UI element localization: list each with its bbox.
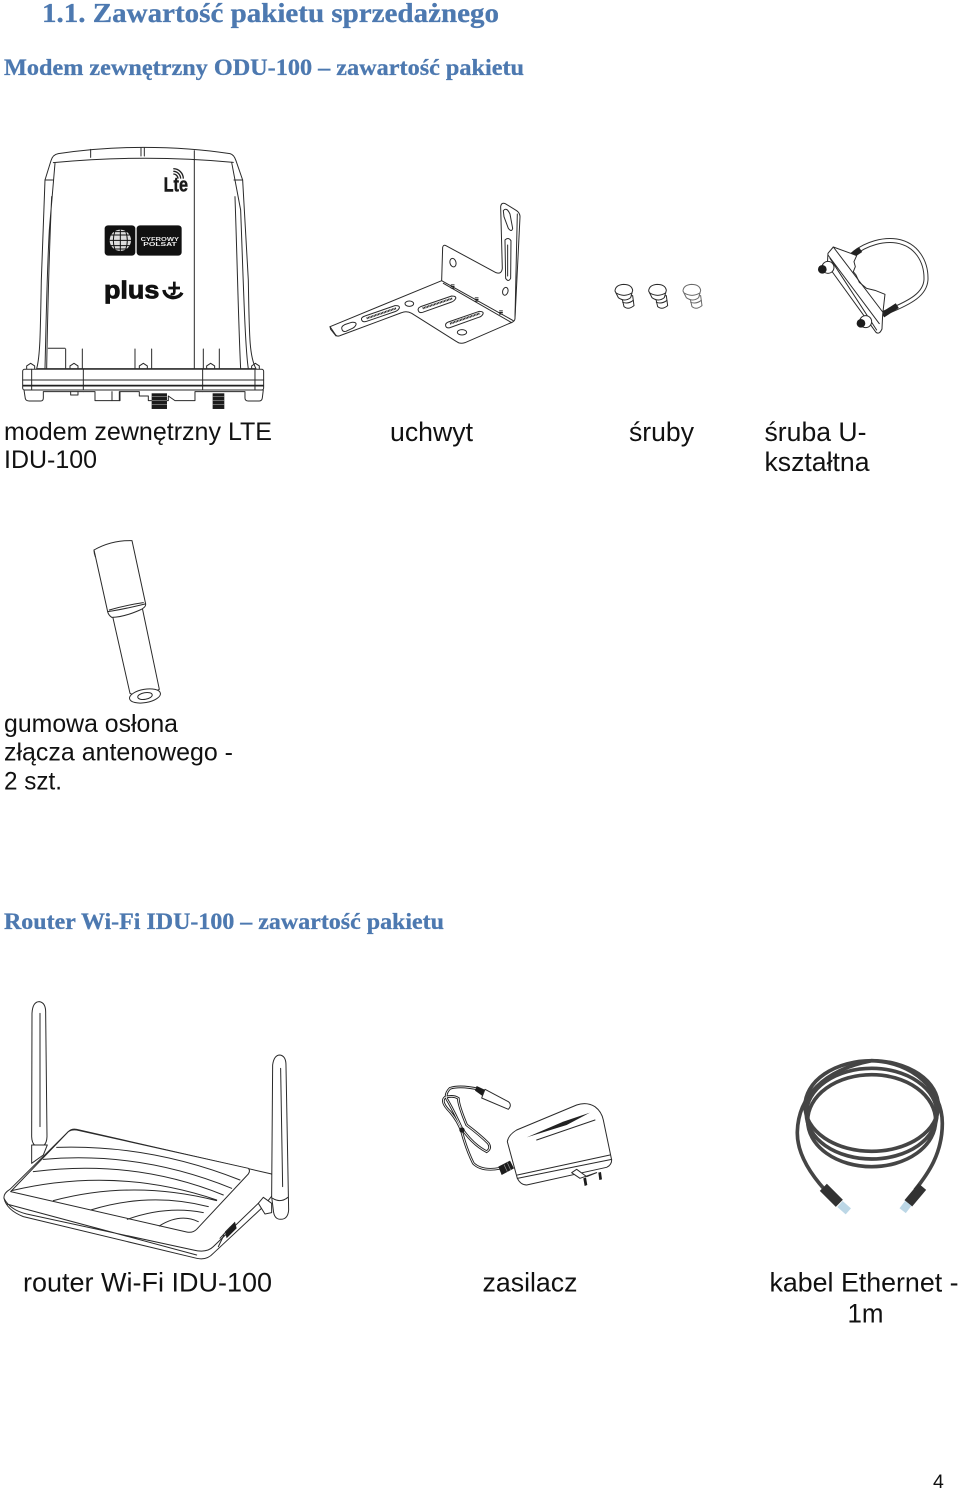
caption: Ethernet cable: 1m: [848, 1298, 884, 1328]
logo: LTE: [164, 169, 188, 196]
caption: connector cover: złącza antenowego -: [4, 738, 233, 766]
caption: Ethernet cable: [770, 1268, 958, 1328]
caption: modem: IDU-100: [4, 446, 97, 474]
logo: Cyfrowy Polsat: CYFROWY: [141, 237, 180, 243]
logo: LTE: Lte: [164, 174, 188, 196]
caption: Ethernet cable: kabel Ethernet -: [770, 1268, 958, 1298]
icon: power adapter: [443, 1086, 612, 1186]
logo: Cyfrowy Polsat: [105, 225, 182, 256]
icon: mounting bracket: [330, 203, 520, 343]
icon: U-bolt: [818, 241, 926, 333]
logo: plus: plus: [104, 276, 159, 304]
caption: U-bolt: kształtna: [764, 447, 870, 477]
caption: power adapter: zasilacz: [482, 1268, 578, 1298]
icon: rubber connector cover: [94, 541, 162, 705]
heading: modem section: Modem zewnętrzny ODU-100 – zawartość pakietu: [4, 55, 524, 81]
caption: connector cover: [4, 710, 233, 796]
caption: connector cover: 2 szt.: [4, 768, 62, 796]
caption: U-bolt: [764, 417, 870, 477]
caption: modem: [4, 418, 272, 474]
caption: bracket: uchwyt: [390, 417, 473, 447]
caption: screws: śruby: [629, 417, 694, 447]
icon: screws: [615, 284, 702, 308]
logo: Cyfrowy Polsat: POLSAT: [143, 242, 178, 248]
caption: U-bolt: śruba U-: [764, 417, 866, 447]
icon: Wi-Fi router: [4, 1002, 289, 1259]
caption: connector cover: gumowa osłona: [4, 710, 178, 738]
icon: outdoor modem: [23, 147, 264, 409]
caption: modem: modem zewnętrzny LTE: [4, 418, 272, 446]
heading: router section: Router Wi-Fi IDU-100 – zawartość pakietu: [4, 909, 444, 935]
caption: router: router Wi-Fi IDU-100: [23, 1268, 272, 1298]
icon: Ethernet cable: [797, 1061, 942, 1211]
logo: plus: [104, 276, 182, 304]
